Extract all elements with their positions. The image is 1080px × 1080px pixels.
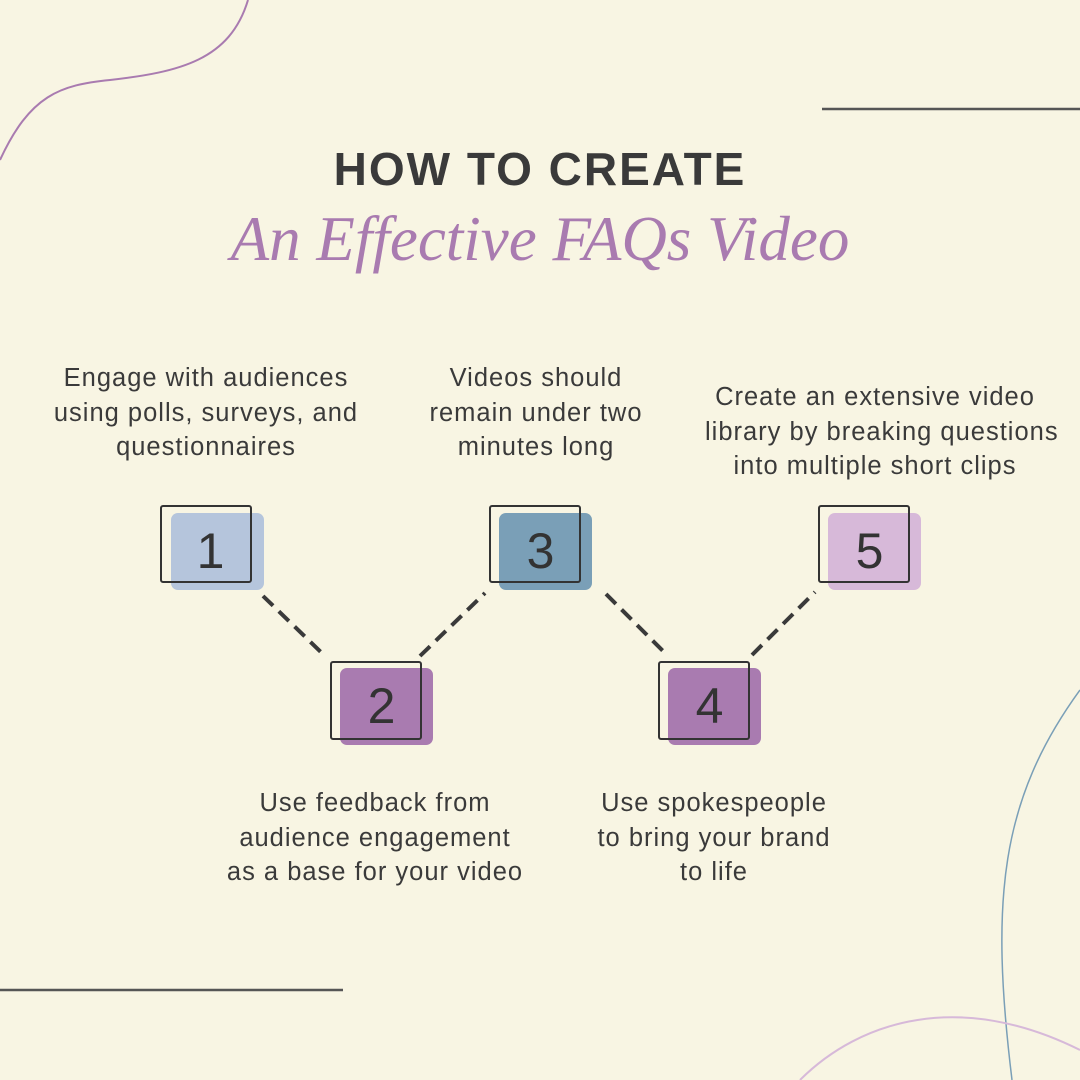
text 3: Videos should bbox=[450, 364, 622, 392]
text 5 bbox=[705, 383, 1059, 480]
text 2: Use feedback from bbox=[259, 789, 490, 817]
text 1: using polls, surveys, and bbox=[54, 398, 358, 426]
text 1 bbox=[54, 364, 358, 461]
text 3 bbox=[429, 364, 642, 461]
title: HOW TO CREATE bbox=[334, 143, 746, 195]
text 4: Use spokespeople bbox=[601, 789, 827, 817]
text 1: Engage with audiences bbox=[64, 364, 348, 392]
text 5: into multiple short clips bbox=[734, 452, 1016, 480]
step 2 bbox=[330, 661, 433, 745]
text 4 bbox=[597, 789, 831, 886]
text 5: Create an extensive video bbox=[715, 383, 1035, 411]
text 2: audience engagement bbox=[239, 824, 511, 852]
step 5 bbox=[818, 505, 921, 590]
text 1: questionnaires bbox=[116, 433, 296, 461]
step 3 bbox=[489, 505, 592, 590]
step 4: 4 bbox=[696, 678, 723, 734]
step 2: 2 bbox=[368, 678, 395, 734]
step 3: 3 bbox=[527, 523, 554, 579]
text 4: to life bbox=[680, 858, 748, 886]
text 3: remain under two bbox=[429, 398, 642, 426]
text 5: library by breaking questions bbox=[705, 418, 1059, 446]
text 2: as a base for your video bbox=[227, 858, 523, 886]
text 4: to bring your brand bbox=[597, 824, 831, 852]
text 3: minutes long bbox=[458, 433, 614, 461]
step 1 bbox=[160, 505, 264, 590]
subtitle script: An Effective FAQs Video bbox=[231, 204, 849, 274]
step 4 bbox=[658, 661, 761, 745]
step 5: 5 bbox=[856, 523, 883, 579]
step 1: 1 bbox=[197, 523, 224, 579]
text 2 bbox=[227, 789, 523, 886]
